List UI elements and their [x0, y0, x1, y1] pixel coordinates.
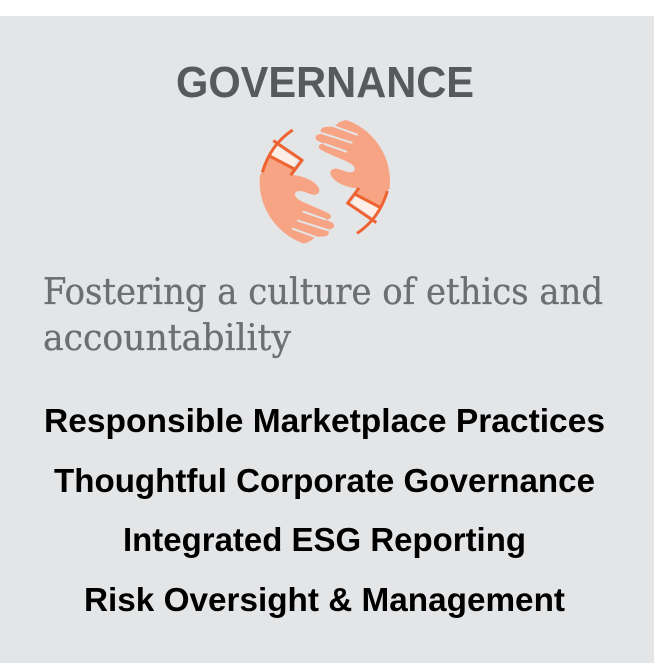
item 1: Responsible Marketplace Practices	[44, 402, 605, 439]
subtitle: accountability	[43, 318, 292, 359]
title: GOVERNANCE	[176, 58, 474, 107]
subtitle: Fostering a culture of ethics and	[43, 272, 603, 313]
icon: two hands forming a circle	[260, 120, 390, 243]
subtitle	[43, 272, 603, 359]
item 4: Risk Oversight & Management	[84, 581, 565, 618]
list of governance priorities	[44, 402, 605, 618]
left hand	[260, 130, 334, 243]
right hand	[316, 120, 390, 233]
item 3: Integrated ESG Reporting	[123, 521, 526, 558]
item 2: Thoughtful Corporate Governance	[54, 462, 595, 499]
